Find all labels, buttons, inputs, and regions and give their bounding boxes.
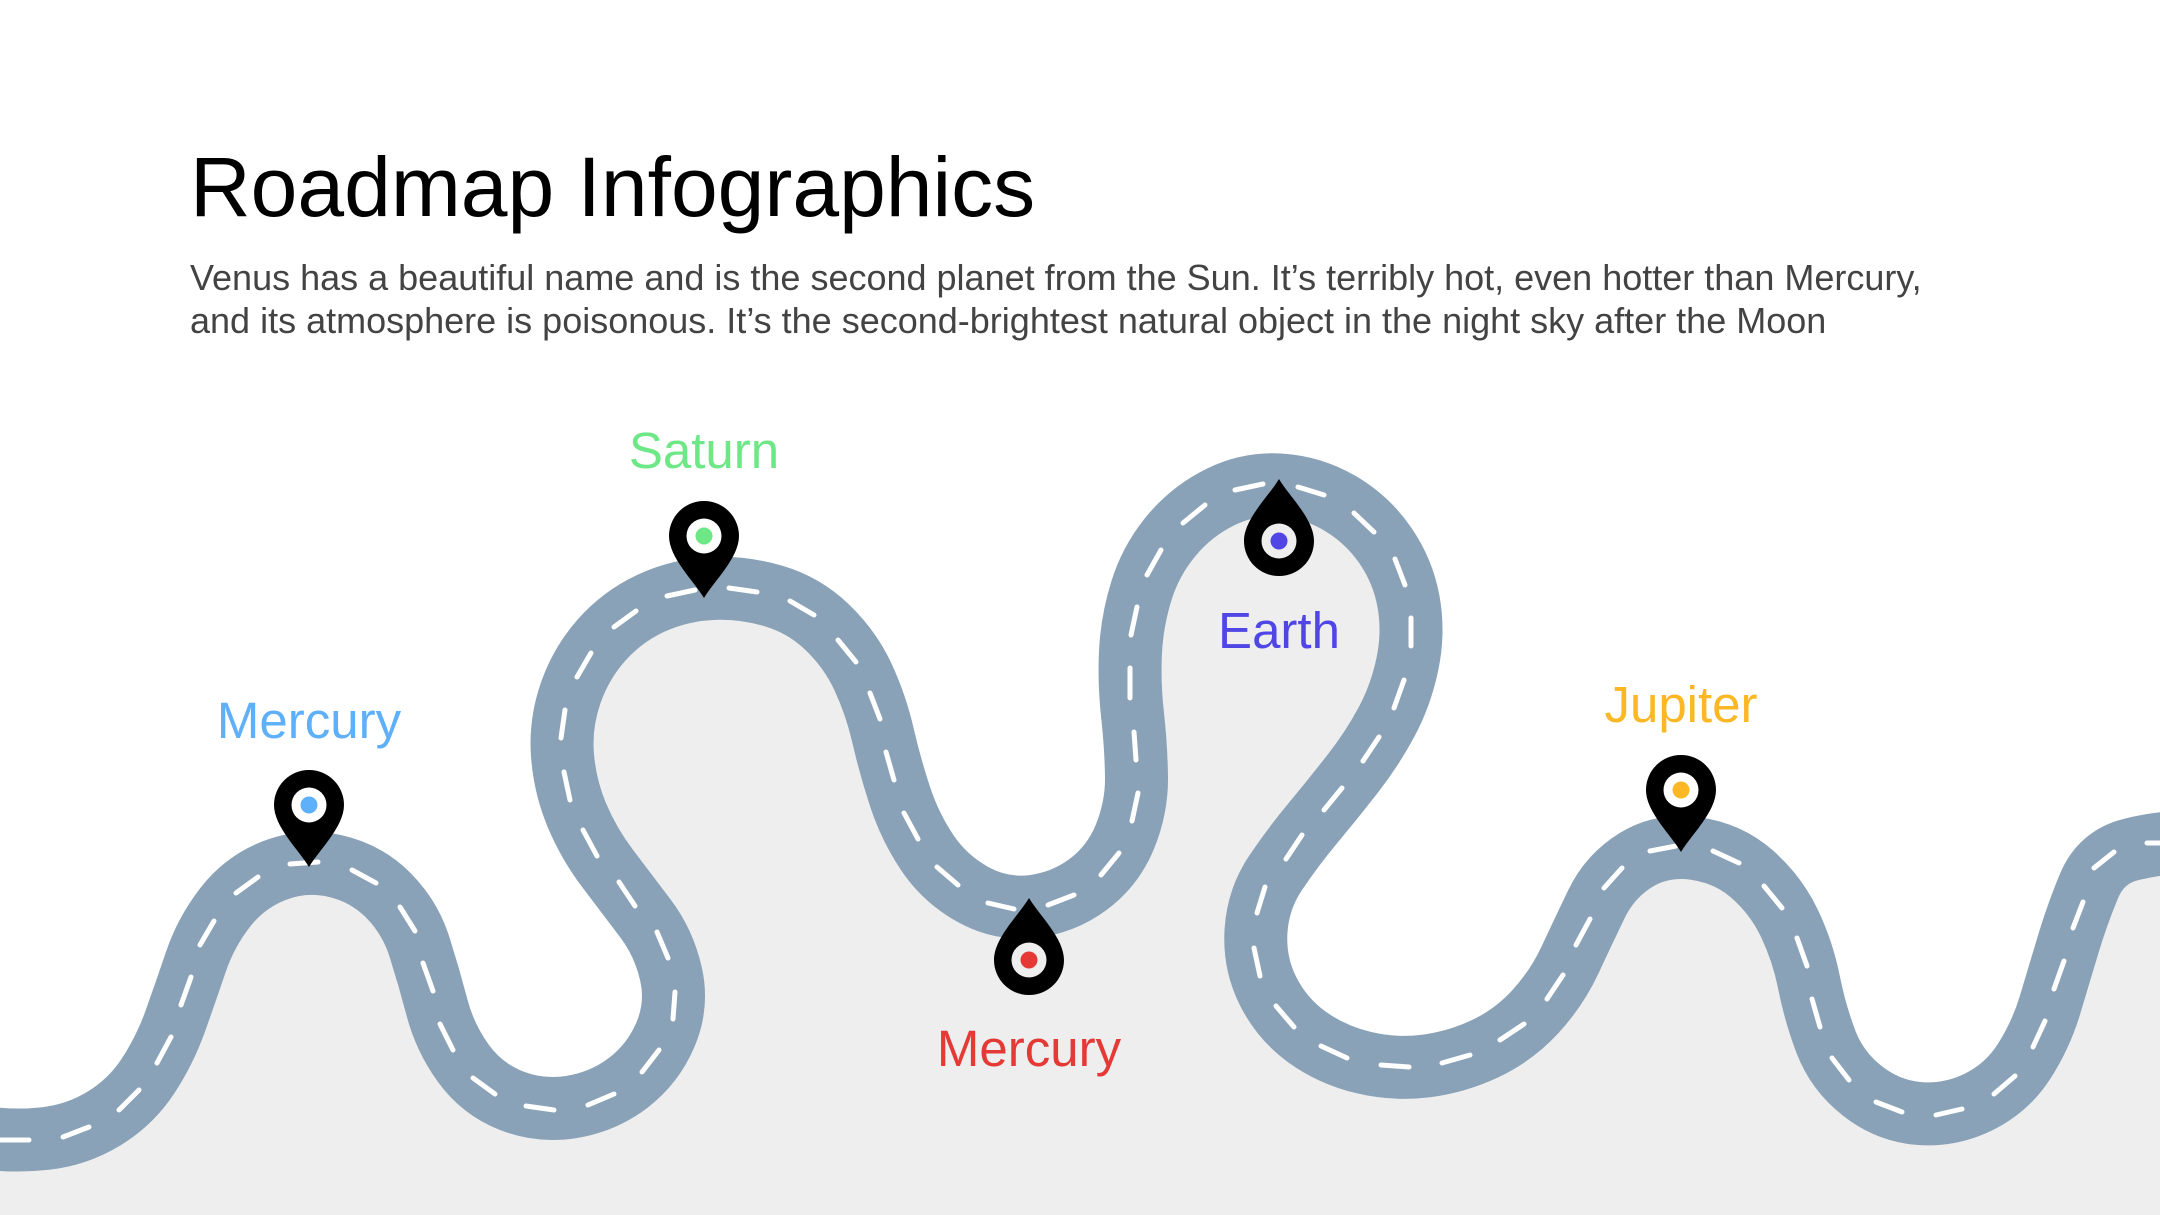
road surface [0,485,2160,1140]
icon: map pin [669,501,739,598]
icon: inverted map pin [994,898,1064,995]
intro paragraph [190,257,1922,341]
intro paragraph: and its atmosphere is poisonous. It’s the second-brightest natural object in the night sky after the Moon [190,300,1826,341]
milestone: Saturn (green) [629,422,779,598]
ground area below the road [0,485,2160,1215]
label: Mercury [217,692,402,749]
milestone: Mercury (red) [937,898,1122,1077]
label: Jupiter [1604,676,1758,733]
icon: inverted map pin [1244,479,1314,576]
label: Mercury [937,1020,1122,1077]
icon: map pin [1646,755,1716,852]
road centre dashes [0,484,2160,1140]
icon: map pin [274,770,344,867]
label: Saturn [629,422,779,479]
milestone: Mercury (blue) [217,692,402,867]
title: Roadmap Infographics [190,140,1035,234]
milestone: Jupiter (amber) [1604,676,1758,852]
intro paragraph: Venus has a beautiful name and is the second planet from the Sun. It’s terribly hot, even hotter than Mercury, [190,257,1922,298]
label: Earth [1218,602,1340,659]
winding road [0,484,2160,1140]
milestone: Earth (indigo) [1218,479,1340,659]
